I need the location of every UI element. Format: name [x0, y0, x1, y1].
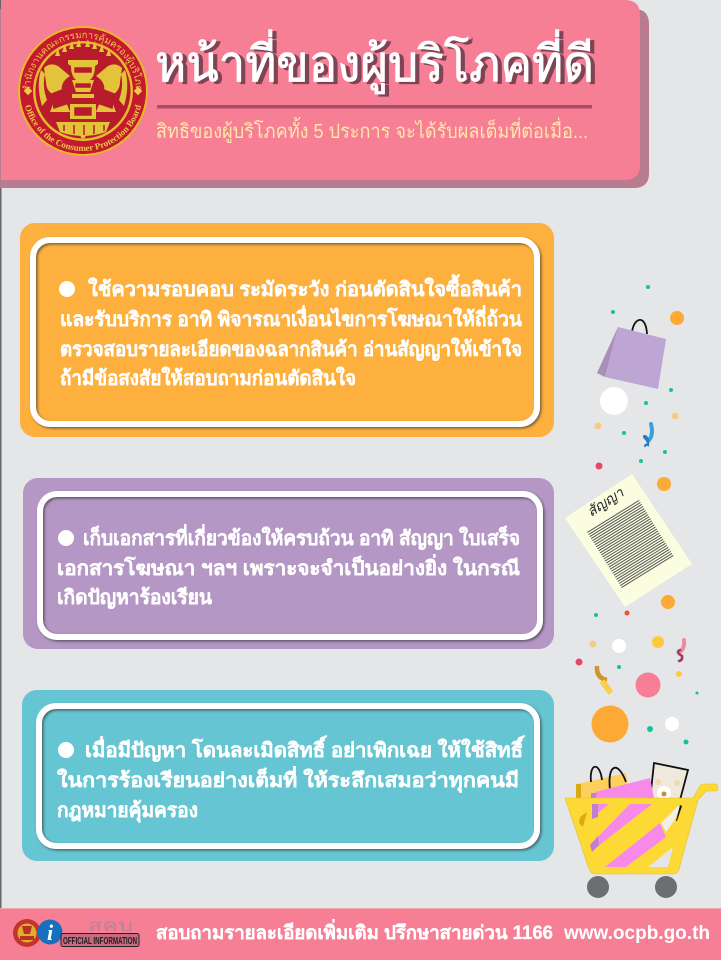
text block: ตรวจสอบรายละเอียดของฉลากสินค้า อ่านสัญญาให้เข้าใจ	[60, 337, 522, 361]
icon: purple shopping bag	[597, 320, 666, 389]
bullet	[58, 742, 74, 758]
text block: กฎหมายคุ้มครอง	[57, 799, 198, 823]
footer website: www.ocpb.go.th	[563, 923, 710, 944]
footer bar	[0, 908, 721, 960]
footer contact text: สอบถามรายละเอียดเพิ่มเติม ปรึกษาสายด่วน 1166	[156, 919, 553, 944]
text block: เอกสารโฆษณา ฯลฯ เพราะจะจำเป็นอย่างยิ่ง ในกรณี	[57, 553, 520, 580]
text block	[57, 523, 520, 609]
panel: teal advice card	[22, 690, 554, 861]
pink box	[595, 778, 654, 798]
text block: เก็บเอกสารที่เกี่ยวข้องให้ครบถ้วน อาทิ สัญญา ใบเสร็จ	[83, 523, 520, 550]
icon: blue ribbon	[644, 424, 652, 446]
icon: pink ribbon	[678, 640, 684, 661]
cut-out	[648, 847, 673, 867]
text block: เมื่อมีปัญหา โดนละเมิดสิทธิ์ อย่าเพิกเฉย ให้ใช้สิทธิ์	[85, 735, 525, 762]
text block: เกิดปัญหาร้องเรียน	[57, 586, 212, 609]
footer logos	[13, 916, 139, 947]
cart basket	[565, 784, 718, 874]
text block: ใช้ความรอบคอบ ระมัดระวัง ก่อนตัดสินใจซื้อสินค้า	[88, 274, 522, 301]
bullet	[59, 281, 75, 297]
phone	[650, 763, 688, 800]
text block: ในการร้องเรียนอย่างเต็มที่ ให้ระลึกเสมอว่าทุกคนมี	[57, 765, 519, 793]
footer logos: OFFICIAL INFORMATION	[63, 935, 137, 947]
document title: สัญญา	[584, 484, 628, 520]
text block: และรับบริการ อาทิ พิจารณาเงื่อนไขการโฆษณาให้ถี่ถ้วน	[60, 304, 522, 331]
icon: shopping cart	[565, 763, 718, 898]
footer logos: สคบ	[88, 916, 133, 935]
yellow bag	[577, 773, 630, 798]
panel: purple advice card	[23, 478, 554, 649]
logo: Office of the Consumer Protection Board seal	[18, 26, 148, 156]
confetti dots	[576, 285, 698, 744]
wheels	[587, 876, 677, 898]
title: หน้าที่ของผู้บริโภคที่ดี	[159, 32, 598, 96]
panel: orange advice card	[20, 223, 554, 437]
text block	[57, 735, 525, 823]
bullet	[58, 530, 74, 546]
icon: contract document	[565, 474, 692, 607]
subtitle: สิทธิของผู้บริโภคทั้ง 5 ประการ จะได้รับผลเต็มที่ต่อเมื่อ...	[156, 117, 588, 144]
text block: ถ้ามีข้อสงสัยให้สอบถามก่อนตัดสินใจ	[60, 366, 356, 390]
stripes	[592, 804, 609, 818]
header banner	[0, 0, 649, 188]
logo: Office of the Consumer Protection Board seal: สำนักงานคณะกรรมการคุ้มครองผู้บริโภค	[22, 32, 143, 90]
title: หน้าที่ของผู้บริโภคที่ดี	[155, 30, 594, 94]
footer logos: i	[47, 920, 54, 945]
text block	[60, 274, 522, 390]
logo: Office of the Consumer Protection Board seal: Office of the Consumer Protection Board	[26, 104, 142, 151]
icon: gold ribbon	[597, 666, 611, 693]
